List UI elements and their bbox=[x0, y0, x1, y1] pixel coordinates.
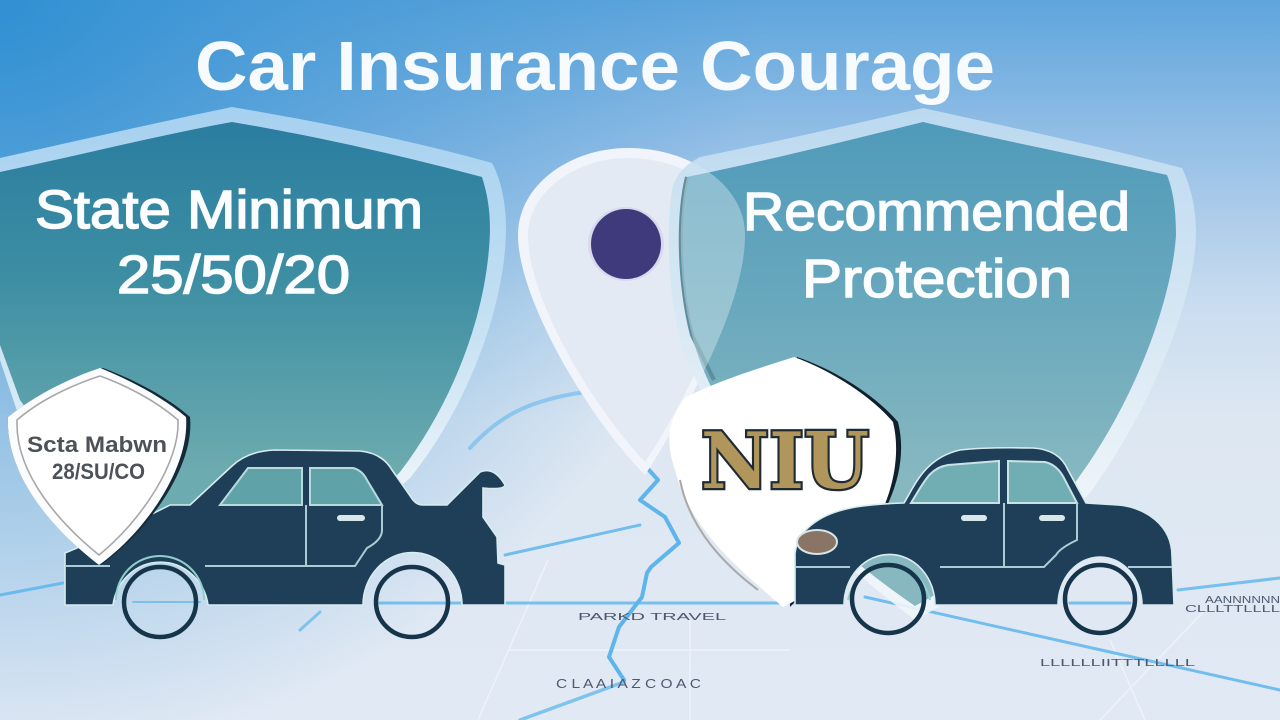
title: Car Insurance Courage bbox=[195, 27, 995, 105]
icon: left car with open trunk bbox=[65, 450, 505, 637]
panel: state minimum shield bbox=[0, 107, 506, 555]
shield figure: 25/50/20: 25/50/20 bbox=[117, 245, 350, 305]
badge text: Scta Mabwn bbox=[27, 432, 167, 457]
headlight bbox=[797, 530, 837, 554]
map background with roads and labels: LLLLLLIITTTLLLLL bbox=[1040, 658, 1196, 669]
badge figure: 28/SU/CO bbox=[52, 459, 145, 484]
map background with roads and labels bbox=[0, 392, 1280, 720]
badge: small state minimum shield bbox=[8, 368, 190, 565]
map background with roads and labels: C L A A I A Z C O A C bbox=[556, 676, 701, 691]
panel: recommended protection shield bbox=[668, 108, 1196, 619]
shield heading: protection: Protection bbox=[802, 249, 1072, 309]
map background with roads and labels: CLLLTTLLLL bbox=[1185, 604, 1280, 615]
badge: NIU shield bbox=[669, 357, 901, 607]
shield heading: recommended: Recommended bbox=[743, 182, 1130, 242]
shield heading: state minimum: State Minimum bbox=[35, 180, 423, 240]
NIU lettering: NIU bbox=[701, 416, 869, 507]
map background with roads and labels: AANNNNNN bbox=[1205, 595, 1280, 606]
map background with roads and labels: PARKD TRAVEL bbox=[578, 612, 727, 623]
icon: right car bbox=[795, 448, 1174, 633]
icon: map location pin bbox=[518, 148, 745, 475]
